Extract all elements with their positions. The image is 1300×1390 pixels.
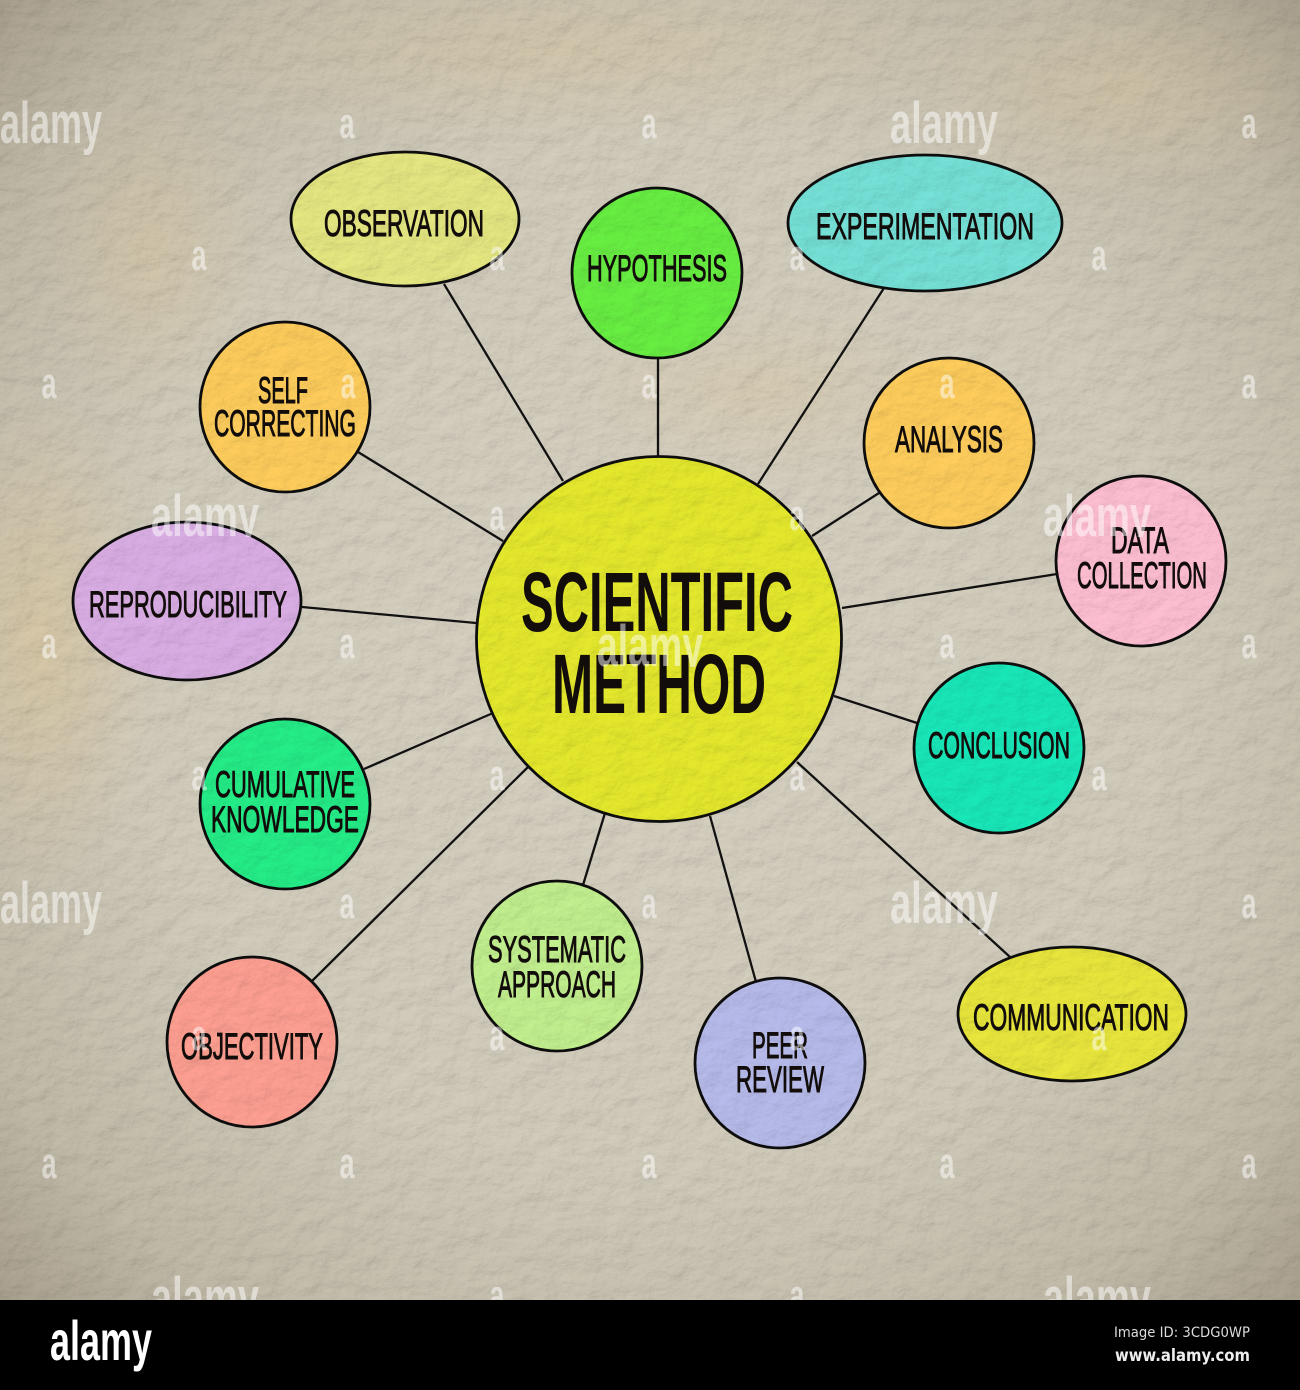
node: peer review xyxy=(695,978,865,1148)
watermarks: alamy xyxy=(1043,484,1151,549)
watermarks: a xyxy=(790,751,805,800)
watermarks: a xyxy=(192,751,207,800)
watermarks: a xyxy=(790,1271,805,1320)
node: data collection: DATA xyxy=(1111,520,1169,561)
footer logo: alamy xyxy=(50,1309,152,1372)
node: cumulative knowledge: KNOWLEDGE xyxy=(211,799,359,840)
watermarks: a xyxy=(940,1139,955,1188)
watermarks: a xyxy=(340,879,355,928)
watermarks: a xyxy=(642,99,657,148)
node: data collection xyxy=(1056,476,1226,646)
watermarks: a xyxy=(1092,1011,1107,1060)
node: systematic approach: APPROACH xyxy=(498,964,616,1005)
title xyxy=(521,555,793,731)
watermarks: a xyxy=(192,1011,207,1060)
watermarks: a xyxy=(42,1139,57,1188)
watermarks: a xyxy=(790,491,805,540)
center node: scientific method xyxy=(476,456,842,822)
watermarks: a xyxy=(642,1139,657,1188)
watermarks: a xyxy=(790,231,805,280)
watermarks: alamy xyxy=(1043,1266,1151,1331)
watermarks: a xyxy=(642,359,657,408)
node: self correcting: SELF xyxy=(258,370,308,411)
watermarks: a xyxy=(340,619,355,668)
watermarks: a xyxy=(490,231,505,280)
node: experimentation xyxy=(788,155,1062,291)
node: conclusion xyxy=(914,663,1084,833)
watermarks: a xyxy=(1092,231,1107,280)
node: analysis xyxy=(864,358,1034,528)
watermarks: a xyxy=(340,359,356,408)
watermarks: a xyxy=(340,1139,355,1188)
watermarks: a xyxy=(490,751,505,800)
node: conclusion: CONCLUSION xyxy=(928,725,1070,766)
watermarks: a xyxy=(1092,751,1107,800)
watermarks: a xyxy=(340,99,355,148)
node: systematic approach xyxy=(472,881,642,1051)
watermarks: a xyxy=(490,491,505,540)
watermarks: a xyxy=(1242,879,1257,928)
watermarks: a xyxy=(42,619,57,668)
node: objectivity xyxy=(167,957,337,1127)
watermarks: a xyxy=(1242,359,1257,408)
node: self correcting: CORRECTING xyxy=(214,403,356,444)
bottom footer bar xyxy=(0,1300,1300,1390)
node: reproducibility: REPRODUCIBILITY xyxy=(89,584,287,625)
watermarks: a xyxy=(1242,99,1257,148)
watermarks: a xyxy=(940,359,955,408)
node: communication xyxy=(958,947,1186,1081)
watermarks: alamy xyxy=(151,484,259,549)
watermarks: alamy xyxy=(151,1266,259,1331)
node: peer review: PEER xyxy=(752,1025,808,1066)
title: SCIENTIFIC xyxy=(521,555,793,649)
watermarks: a xyxy=(192,231,207,280)
node: communication: COMMUNICATION xyxy=(973,997,1169,1038)
node: analysis: ANALYSIS xyxy=(895,419,1003,460)
watermarks: a xyxy=(790,1011,805,1060)
watermarks: a xyxy=(1242,619,1257,668)
node: peer review: REVIEW xyxy=(736,1059,824,1100)
node: observation: OBSERVATION xyxy=(324,203,484,244)
watermarks: a xyxy=(1242,1139,1257,1188)
watermarks: alamy xyxy=(890,91,998,156)
node: reproducibility xyxy=(73,522,301,680)
connector lines from center to topics xyxy=(302,284,1057,982)
node: hypothesis: HYPOTHESIS xyxy=(587,248,727,289)
watermarks: alamy xyxy=(0,871,102,936)
watermarks: a xyxy=(42,359,57,408)
watermarks: a xyxy=(642,879,657,928)
title: METHOD xyxy=(552,637,766,731)
node: observation xyxy=(291,152,519,286)
node: self correcting xyxy=(200,322,370,492)
watermarks: alamy xyxy=(597,614,703,679)
watermarks: a xyxy=(490,1011,505,1060)
footer image id: Image ID: 3CDG0WP xyxy=(1114,1325,1250,1341)
watermarks: alamy xyxy=(0,91,102,156)
watermarks: a xyxy=(490,1271,505,1320)
node: objectivity: OBJECTIVITY xyxy=(181,1026,323,1067)
node: systematic approach: SYSTEMATIC xyxy=(488,929,626,970)
watermarks: alamy xyxy=(890,871,998,936)
node: cumulative knowledge: CUMULATIVE xyxy=(215,764,355,805)
watermarks: a xyxy=(940,619,955,668)
node: cumulative knowledge xyxy=(200,719,370,889)
node: hypothesis xyxy=(572,188,742,358)
footer url: www.alamy.com xyxy=(1115,1346,1250,1366)
node: experimentation: EXPERIMENTATION xyxy=(816,206,1034,247)
